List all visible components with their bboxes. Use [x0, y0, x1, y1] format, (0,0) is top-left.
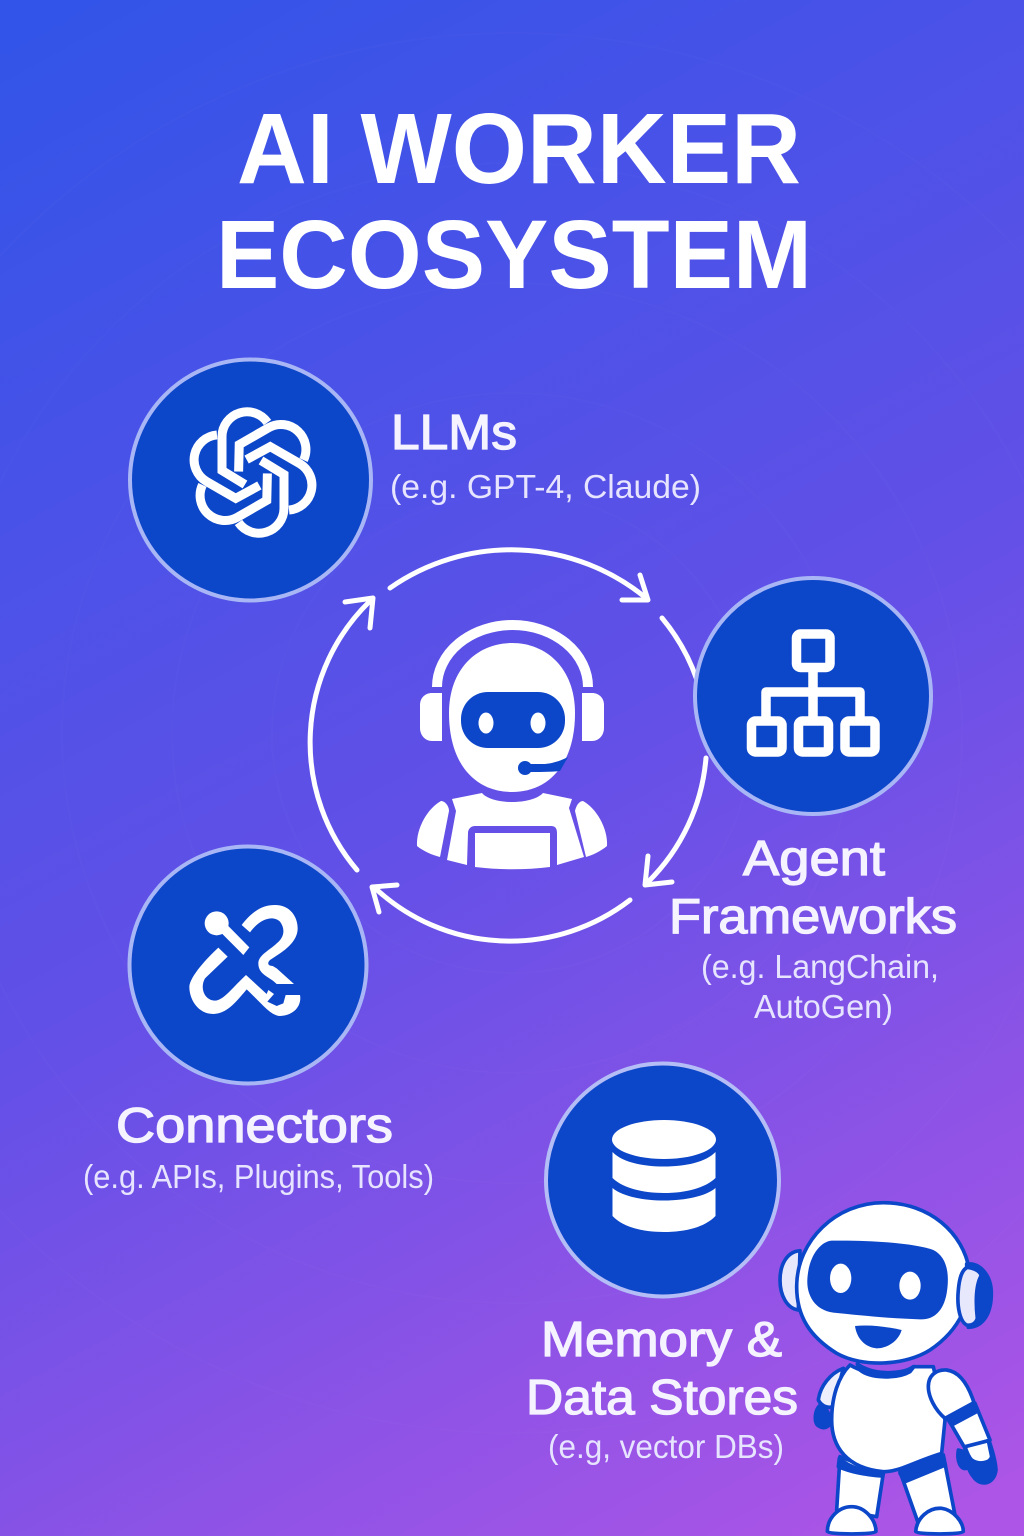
panel: Connectors: [83, 846, 434, 1195]
panel: Agent Frameworks: [669, 578, 957, 1025]
label: Agent Frameworks: [669, 832, 957, 944]
label: Connectors: Connectors: [116, 1099, 393, 1153]
icon: database badge: [546, 1064, 779, 1296]
label: LLMs examples: (e.g. GPT-4, Claude): [390, 468, 701, 505]
label: LLMs: LLMs: [391, 406, 517, 460]
icon: hierarchy badge: [695, 578, 931, 814]
icon: connector tools badge: [130, 846, 366, 1084]
panel: LLMs: [130, 360, 701, 600]
label: Agent Frameworks examples: (e.g. LangChain,: [701, 948, 939, 985]
panel: Memory and Data Stores: [526, 1064, 798, 1465]
label: Agent Frameworks examples: [701, 948, 939, 1025]
mascot robot: [780, 1203, 996, 1534]
title: [216, 93, 812, 309]
title: AI WORKER: [237, 93, 801, 205]
label: Agent Frameworks examples: AutoGen): [754, 988, 893, 1025]
label: Agent Frameworks: Frameworks: [669, 890, 957, 944]
title: ECOSYSTEM: [216, 200, 812, 309]
cycle arrows: [310, 550, 706, 941]
icon: LLM knot badge: [130, 360, 371, 600]
label: Memory and Data Stores: [526, 1313, 798, 1425]
icon: central robot worker: [417, 625, 607, 869]
label: Memory and Data Stores: Memory &: [541, 1313, 782, 1367]
label: Memory and Data Stores: Data Stores: [526, 1371, 798, 1425]
label: Memory examples: (e.g, vector DBs): [548, 1428, 784, 1465]
label: Connectors examples: (e.g. APIs, Plugins, Tools): [83, 1158, 434, 1195]
label: Agent Frameworks: Agent: [743, 832, 885, 886]
